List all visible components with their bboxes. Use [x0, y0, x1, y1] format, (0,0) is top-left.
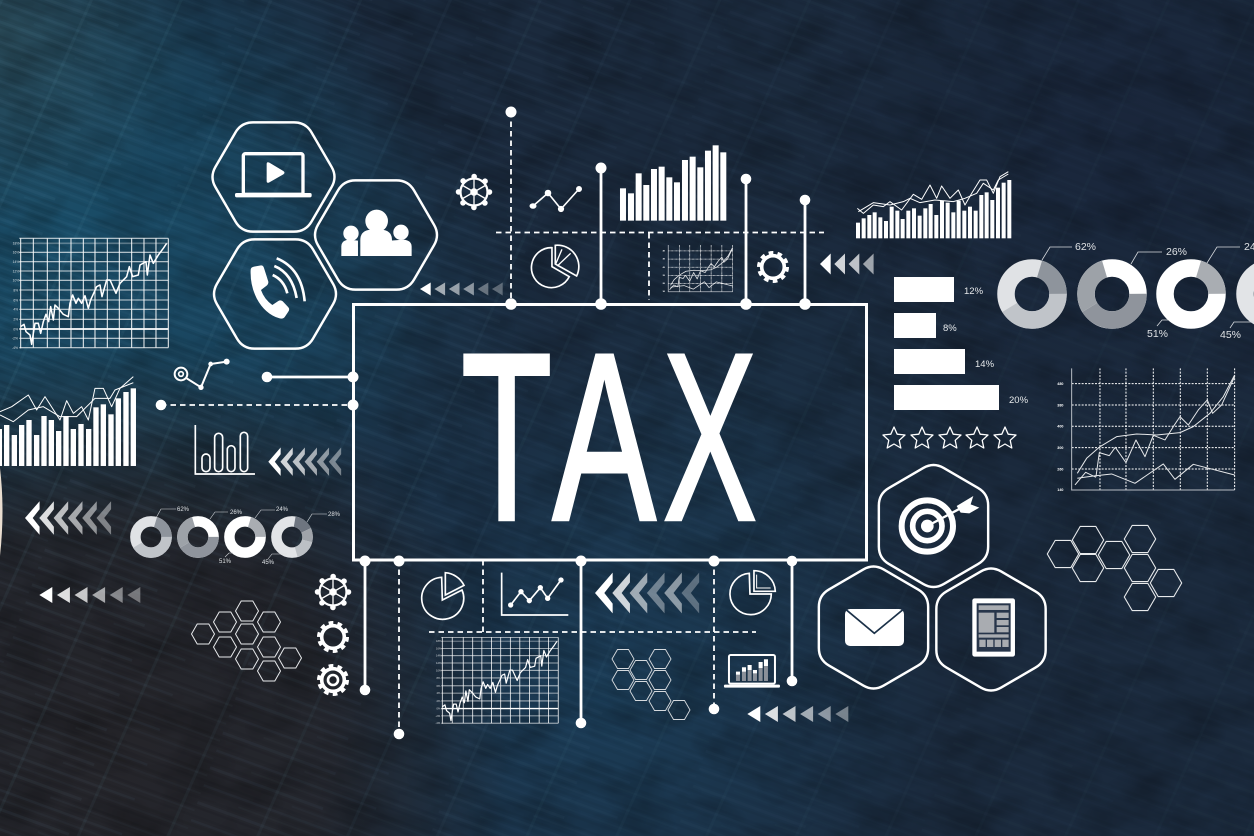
- donut charts large: 51%: [1147, 328, 1168, 340]
- horizontal percent bar chart: 12%: [964, 286, 984, 297]
- donut charts small: 24%: [276, 507, 289, 513]
- donut charts small: 26%: [230, 510, 243, 516]
- laptop with bars icon: [724, 655, 780, 688]
- small node line icon: [175, 359, 230, 390]
- title: TAX: [461, 304, 756, 570]
- rating stars: [883, 427, 1016, 448]
- small line sparkline top: [530, 186, 582, 212]
- chevron arrows left of frame: [268, 447, 341, 476]
- triangle arrows top right: [820, 254, 874, 274]
- top pie icon: [531, 245, 579, 288]
- donut charts small: 28%: [328, 512, 341, 518]
- mini line chart top: [663, 245, 733, 293]
- line chart icon bottom: [502, 573, 568, 615]
- donut charts large: 26%: [1166, 246, 1187, 258]
- title: TAX: T: [461, 304, 552, 569]
- donut charts large: 62%: [1075, 241, 1096, 253]
- solid connector lines: [267, 168, 805, 723]
- bars and lines chart top right: [856, 172, 1011, 238]
- icon hexagon: target with arrow: [879, 465, 988, 587]
- bars and lines chart left: [0, 377, 136, 466]
- frame rectangle: [354, 304, 866, 560]
- donut charts small: 62%: [177, 507, 190, 513]
- donut charts small: 45%: [262, 560, 275, 566]
- dashed connector guides: [161, 112, 824, 734]
- donut charts small: 51%: [219, 559, 232, 565]
- connector nodes: [156, 106, 811, 739]
- chevron arrows far left: [25, 501, 111, 535]
- gears stack bottom left: [318, 576, 348, 694]
- triangle arrows top: [420, 282, 503, 296]
- triangle arrows bottom right: [747, 706, 848, 722]
- icon hexagon: video laptop: [212, 122, 334, 232]
- central frame with connector lines: [156, 106, 866, 739]
- grid chart bottom: [436, 637, 558, 725]
- triangle arrows bottom left: [39, 587, 140, 603]
- donut charts small: [135, 507, 341, 566]
- top bar chart: [620, 145, 726, 221]
- horizontal percent bar chart: [894, 277, 1029, 410]
- icon hexagon: mail envelope: [819, 566, 928, 688]
- gear top right: [759, 253, 787, 281]
- chevron arrows bottom: [595, 573, 699, 613]
- capsule bar icon: [195, 425, 255, 474]
- icon hexagon: people group: [315, 180, 437, 290]
- hexagon cluster bottom center: [612, 650, 690, 720]
- gear wheel top: [458, 176, 490, 208]
- hexagon cluster right: [1047, 525, 1182, 611]
- pie icon bottom right: [730, 571, 775, 615]
- hexagon cluster bottom left: [192, 601, 302, 681]
- icon hexagon: phone: [214, 239, 336, 349]
- horizontal percent bar chart: 14%: [975, 359, 995, 370]
- horizontal percent bar chart: 8%: [943, 323, 957, 334]
- grid chart left: [12, 238, 168, 350]
- donut charts large: 45%: [1220, 329, 1241, 341]
- title: TAX: A: [553, 305, 655, 570]
- horizontal percent bar chart: 20%: [1009, 395, 1029, 406]
- donut charts large: [1006, 241, 1254, 341]
- line chart right: [1057, 368, 1235, 492]
- icon hexagon: tablet: [936, 568, 1046, 690]
- pie icon bottom left: [422, 573, 464, 619]
- title: TAX: X: [664, 305, 756, 570]
